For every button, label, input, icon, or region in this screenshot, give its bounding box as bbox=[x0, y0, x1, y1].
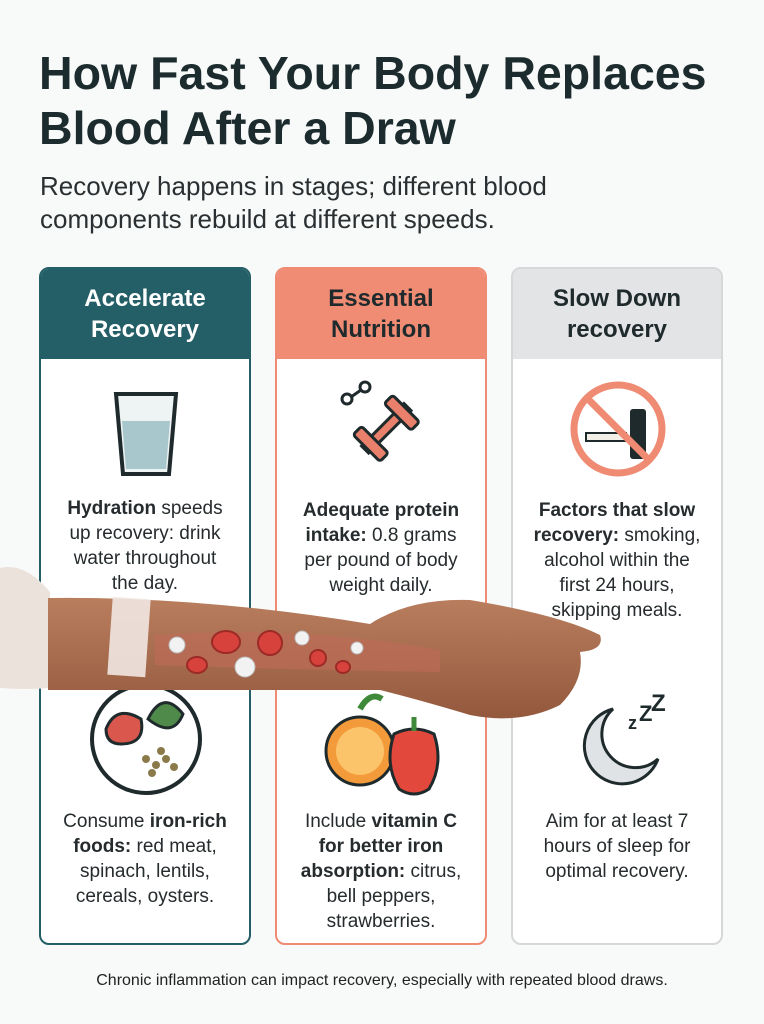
heading: nutrition: Essential bbox=[328, 285, 434, 312]
subtitle: components rebuild at different speeds. bbox=[40, 204, 495, 234]
icon: moon: Z bbox=[639, 701, 652, 726]
arm illustration with blood cells bbox=[0, 567, 601, 718]
icon: moon: z bbox=[628, 713, 637, 733]
heading: accelerate: Accelerate bbox=[84, 285, 206, 312]
text: factors: Factors that slow recovery: smoking, alcohol within the first 24 hours, skipping meals. bbox=[534, 500, 700, 621]
icon: water glass bbox=[114, 392, 178, 476]
text: sleep: Aim for at least 7 hours of sleep for optimal recovery. bbox=[544, 811, 690, 882]
heading: slow down: recovery bbox=[567, 316, 667, 343]
icon: moon: Z bbox=[651, 690, 666, 717]
panel: essential nutrition bbox=[275, 267, 487, 945]
icon: iron foods plate bbox=[90, 690, 202, 795]
text: hydration: Hydration speeds up recovery: drink water throughout the day. bbox=[67, 498, 223, 594]
heading: accelerate bbox=[41, 269, 249, 359]
title: Blood After a Draw bbox=[39, 102, 456, 154]
icon: orange and pepper bbox=[324, 694, 440, 796]
panel: slow down recovery bbox=[511, 267, 723, 945]
title: How Fast Your Body Replaces bbox=[39, 47, 707, 99]
icon: moon bbox=[582, 690, 666, 786]
heading: accelerate: Recovery bbox=[91, 316, 199, 343]
title bbox=[39, 47, 707, 154]
heading: slow down: Slow Down bbox=[553, 285, 681, 312]
footer note: Chronic inflammation can impact recovery, especially with repeated blood draws. bbox=[96, 972, 668, 989]
heading: nutrition bbox=[277, 269, 485, 359]
heading: nutrition: Nutrition bbox=[331, 316, 431, 343]
text: protein: Adequate protein intake: 0.8 grams per pound of body weight daily. bbox=[303, 500, 459, 596]
text: iron: Consume iron-rich foods: red meat, spinach, lentils, cereals, oysters. bbox=[63, 811, 227, 907]
subtitle bbox=[40, 171, 547, 234]
icon: dumbbell bbox=[340, 380, 420, 462]
text: vitamin c: Include vitamin C for better iron absorption: citrus, bell peppers, strawberries. bbox=[301, 811, 461, 932]
subtitle: Recovery happens in stages; different blood bbox=[40, 171, 547, 201]
icon: no smoking/alcohol bbox=[570, 382, 666, 476]
heading: slow down bbox=[513, 269, 721, 359]
panel: accelerate recovery bbox=[39, 267, 251, 945]
